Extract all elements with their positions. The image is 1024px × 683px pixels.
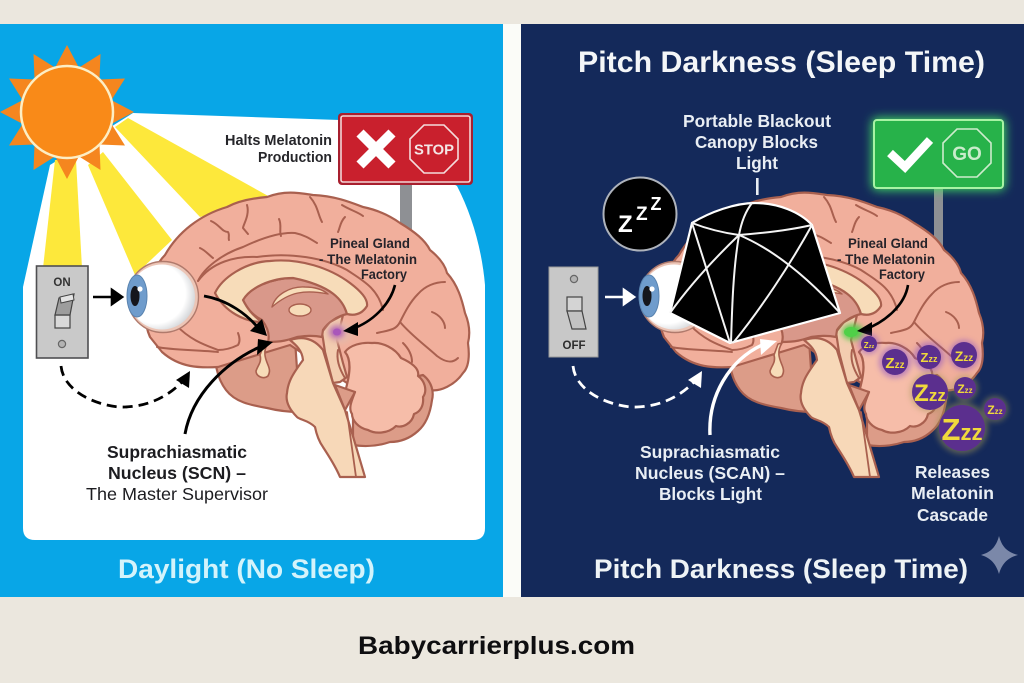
label: scn: Nucleus (SCN) –	[108, 463, 246, 483]
arrow: label to pineal	[343, 285, 395, 336]
white light field	[23, 113, 485, 540]
footer: site name: Babycarrierplus.com	[358, 632, 635, 660]
arrow: label to pineal dark	[857, 285, 908, 336]
arrow: eye to scn	[204, 296, 267, 336]
melatonin cascade bubbles: Zzz	[885, 355, 905, 372]
icon: sparkle	[981, 536, 1018, 574]
arrow: label to scan white	[710, 339, 777, 435]
melatonin cascade bubbles: Zzz	[957, 382, 973, 396]
arrow: dashed feedback	[61, 366, 190, 407]
label: portable blackout canopy: Light	[736, 153, 778, 173]
sign: stop	[338, 113, 473, 185]
go sign post	[934, 186, 943, 252]
icon: white cross	[360, 133, 392, 165]
sign: go	[872, 118, 1005, 190]
heading: pitch darkness: Pitch Darkness (Sleep Time)	[578, 46, 985, 79]
icon: light switch off	[549, 267, 598, 357]
melatonin cascade bubbles: Zzz	[987, 403, 1003, 417]
label: melatonin cascade: Melatonin	[911, 483, 994, 503]
label: melatonin cascade: Releases	[915, 462, 990, 482]
icon: checkmark	[890, 140, 930, 167]
label: pineal gland dark: Pineal Gland	[848, 236, 928, 251]
icon: zzz badge: Z	[618, 211, 633, 238]
icon: zzz badge: Z	[650, 194, 662, 214]
icon: eyeball	[127, 262, 198, 332]
stop sign post	[400, 184, 412, 232]
brain: darkness	[659, 193, 983, 477]
panel gutter	[502, 24, 522, 597]
label: pineal gland dark: Factory	[879, 267, 925, 282]
arrow: switch to eye	[93, 290, 122, 304]
icon: sun	[0, 45, 134, 179]
canopy pointer	[756, 178, 759, 195]
panel: pitch darkness	[521, 24, 1024, 597]
pineal gland: purple	[327, 322, 353, 344]
icon: light switch on: ON	[53, 277, 71, 289]
label: melatonin cascade: Cascade	[917, 505, 988, 525]
icon: go octagon: GO	[952, 144, 982, 165]
icon: zzz badge	[604, 178, 676, 250]
label: halts melatonin: Halts Melatonin	[225, 133, 332, 149]
melatonin cascade bubbles: Zzz	[921, 350, 938, 365]
label: scan: Suprachiasmatic	[640, 442, 780, 462]
brain: daylight	[145, 193, 469, 477]
pineal gland: green	[842, 324, 864, 340]
label: pineal gland: Pineal Gland	[330, 236, 410, 251]
icon: light switch on	[36, 266, 88, 358]
label: scn: Suprachiasmatic	[107, 442, 247, 462]
label: scn: The Master Supervisor	[86, 484, 268, 504]
label: halts melatonin: Production	[258, 150, 332, 166]
melatonin cascade bubbles: Zzz	[942, 412, 982, 447]
label: portable blackout canopy: Canopy Blocks	[695, 132, 818, 152]
arrow: label to scn	[185, 339, 273, 434]
label: portable blackout canopy: Portable Blackout	[683, 111, 831, 131]
sunbeams	[43, 118, 270, 275]
canopy	[670, 203, 840, 343]
arrow: dashed feedback white	[573, 366, 702, 407]
icon: zzz badge: Z	[636, 204, 648, 225]
label: pineal gland: Factory	[361, 267, 407, 282]
melatonin cascade bubbles: Zzz	[914, 380, 946, 407]
melatonin cascade bubbles: Zzz	[864, 341, 874, 350]
icon: eyeball dark	[639, 262, 710, 332]
label: scan: Blocks Light	[659, 484, 762, 504]
icon: light switch off: OFF	[562, 340, 586, 352]
melatonin cascade bubbles	[859, 334, 1008, 454]
label: scan: Nucleus (SCAN) –	[635, 463, 785, 483]
caption: daylight: Daylight (No Sleep)	[118, 554, 375, 584]
icon: stop octagon: STOP	[414, 142, 454, 158]
melatonin cascade bubbles: Zzz	[955, 348, 973, 364]
panel: daylight	[0, 24, 503, 597]
label: pineal gland dark: - The Melatonin	[837, 252, 935, 267]
arrow: switch to eye white	[605, 290, 634, 304]
label: pineal gland: - The Melatonin	[319, 252, 417, 267]
caption: pitch darkness: Pitch Darkness (Sleep Time)	[594, 554, 968, 584]
